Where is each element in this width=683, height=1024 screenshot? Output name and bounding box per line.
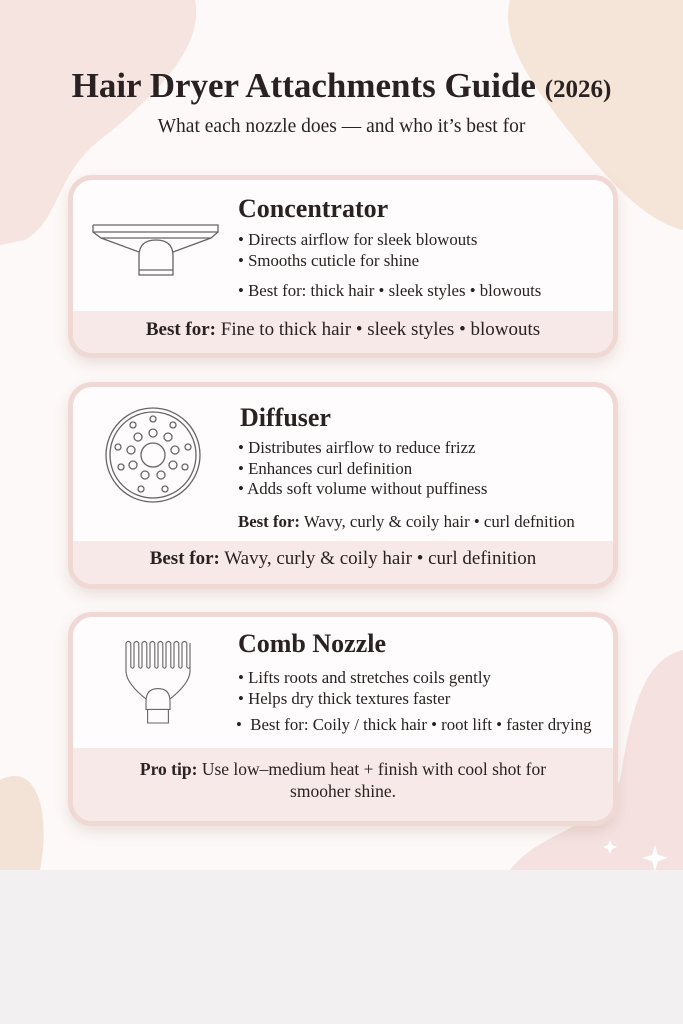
bullets: • Directs airflow for sleek blowouts <box>238 230 477 249</box>
bullets <box>238 438 487 498</box>
title: Hair Dryer Attachments Guide (2026) <box>72 66 611 105</box>
best for line: Best for: Wavy, curly & coily hair • curl defnition <box>238 512 575 531</box>
panel: concentrator <box>68 175 618 358</box>
bullets: • Adds soft volume without puffiness <box>238 479 487 498</box>
band <box>73 541 613 584</box>
heading: Diffuser <box>240 403 331 432</box>
icon: diffuser <box>105 407 201 503</box>
panel: comb nozzle <box>68 612 618 826</box>
band: pro tip: Pro tip: Use low–medium heat + finish with cool shot for <box>140 759 546 779</box>
heading: Concentrator <box>238 194 388 223</box>
icon: comb <box>125 640 191 724</box>
band <box>73 311 613 353</box>
bullets <box>238 668 491 708</box>
band: pro tip: smooher shine. <box>290 781 396 801</box>
bullets: • Distributes airflow to reduce frizz <box>238 438 475 457</box>
bullets: • Lifts roots and stretches coils gently <box>238 668 491 687</box>
bullets <box>238 230 477 270</box>
bullets: • Enhances curl definition <box>238 458 412 478</box>
panel: diffuser <box>68 382 618 589</box>
best for line: • Best for: thick hair • sleek styles • blowouts <box>238 281 541 300</box>
bullets: • Helps dry thick textures faster <box>238 688 450 708</box>
best for line: • Best for: Coily / thick hair • root lift • faster drying <box>236 715 592 734</box>
heading: Comb Nozzle <box>238 629 386 658</box>
bullets: • Smooths cuticle for shine <box>238 250 419 270</box>
subtitle: What each nozzle does — and who it’s best for <box>158 116 525 137</box>
icon: concentrator <box>92 224 219 276</box>
band: Best for: Fine to thick hair • sleek styles • blowouts <box>146 319 540 340</box>
band: pro tip <box>73 748 613 821</box>
band: Best for: Wavy, curly & coily hair • curl definition <box>150 548 536 569</box>
